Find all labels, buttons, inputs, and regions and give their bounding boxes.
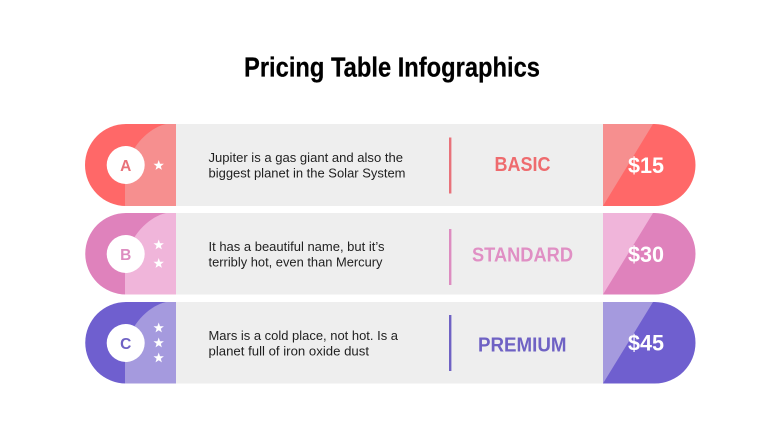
text block: premium description: Mars is a cold place, not hot. Is a <box>208 328 399 343</box>
label: basic: BASIC <box>494 154 550 176</box>
right cap: standard price: $30 <box>628 242 664 267</box>
row: premium plan <box>85 302 695 384</box>
left cap: premium: C <box>120 336 131 353</box>
label: standard: STANDARD <box>472 245 573 267</box>
row: standard plan <box>85 213 695 294</box>
divider: premium <box>449 315 451 371</box>
text block: standard description: It has a beautiful name, but it’s <box>208 239 385 254</box>
left cap: basic <box>85 124 176 206</box>
text block: basic description: Jupiter is a gas giant and also the <box>208 150 403 165</box>
right cap: premium price: $45 <box>628 330 664 356</box>
row: basic plan <box>85 124 695 206</box>
text block: basic description: biggest planet in the Solar System <box>208 166 406 180</box>
panel: standard description background <box>176 213 603 294</box>
title: Pricing Table Infographics <box>244 52 540 82</box>
text block: premium description: planet full of iron oxide dust <box>208 343 369 358</box>
text block: standard description: terribly hot, even than Mercury <box>208 254 383 270</box>
right cap: standard price <box>603 213 695 294</box>
left cap: standard <box>85 213 176 294</box>
left cap: standard: B <box>120 247 131 264</box>
right cap: basic price: $15 <box>628 153 664 178</box>
label: premium: PREMIUM <box>478 335 566 357</box>
divider: basic <box>449 138 451 194</box>
panel: premium description background <box>176 302 603 384</box>
right cap: basic price <box>603 124 695 206</box>
panel: basic description background <box>176 124 603 206</box>
right cap: premium price <box>603 302 695 384</box>
left cap: premium <box>85 302 176 384</box>
divider: standard <box>449 229 451 285</box>
left cap: basic: A <box>120 158 131 175</box>
